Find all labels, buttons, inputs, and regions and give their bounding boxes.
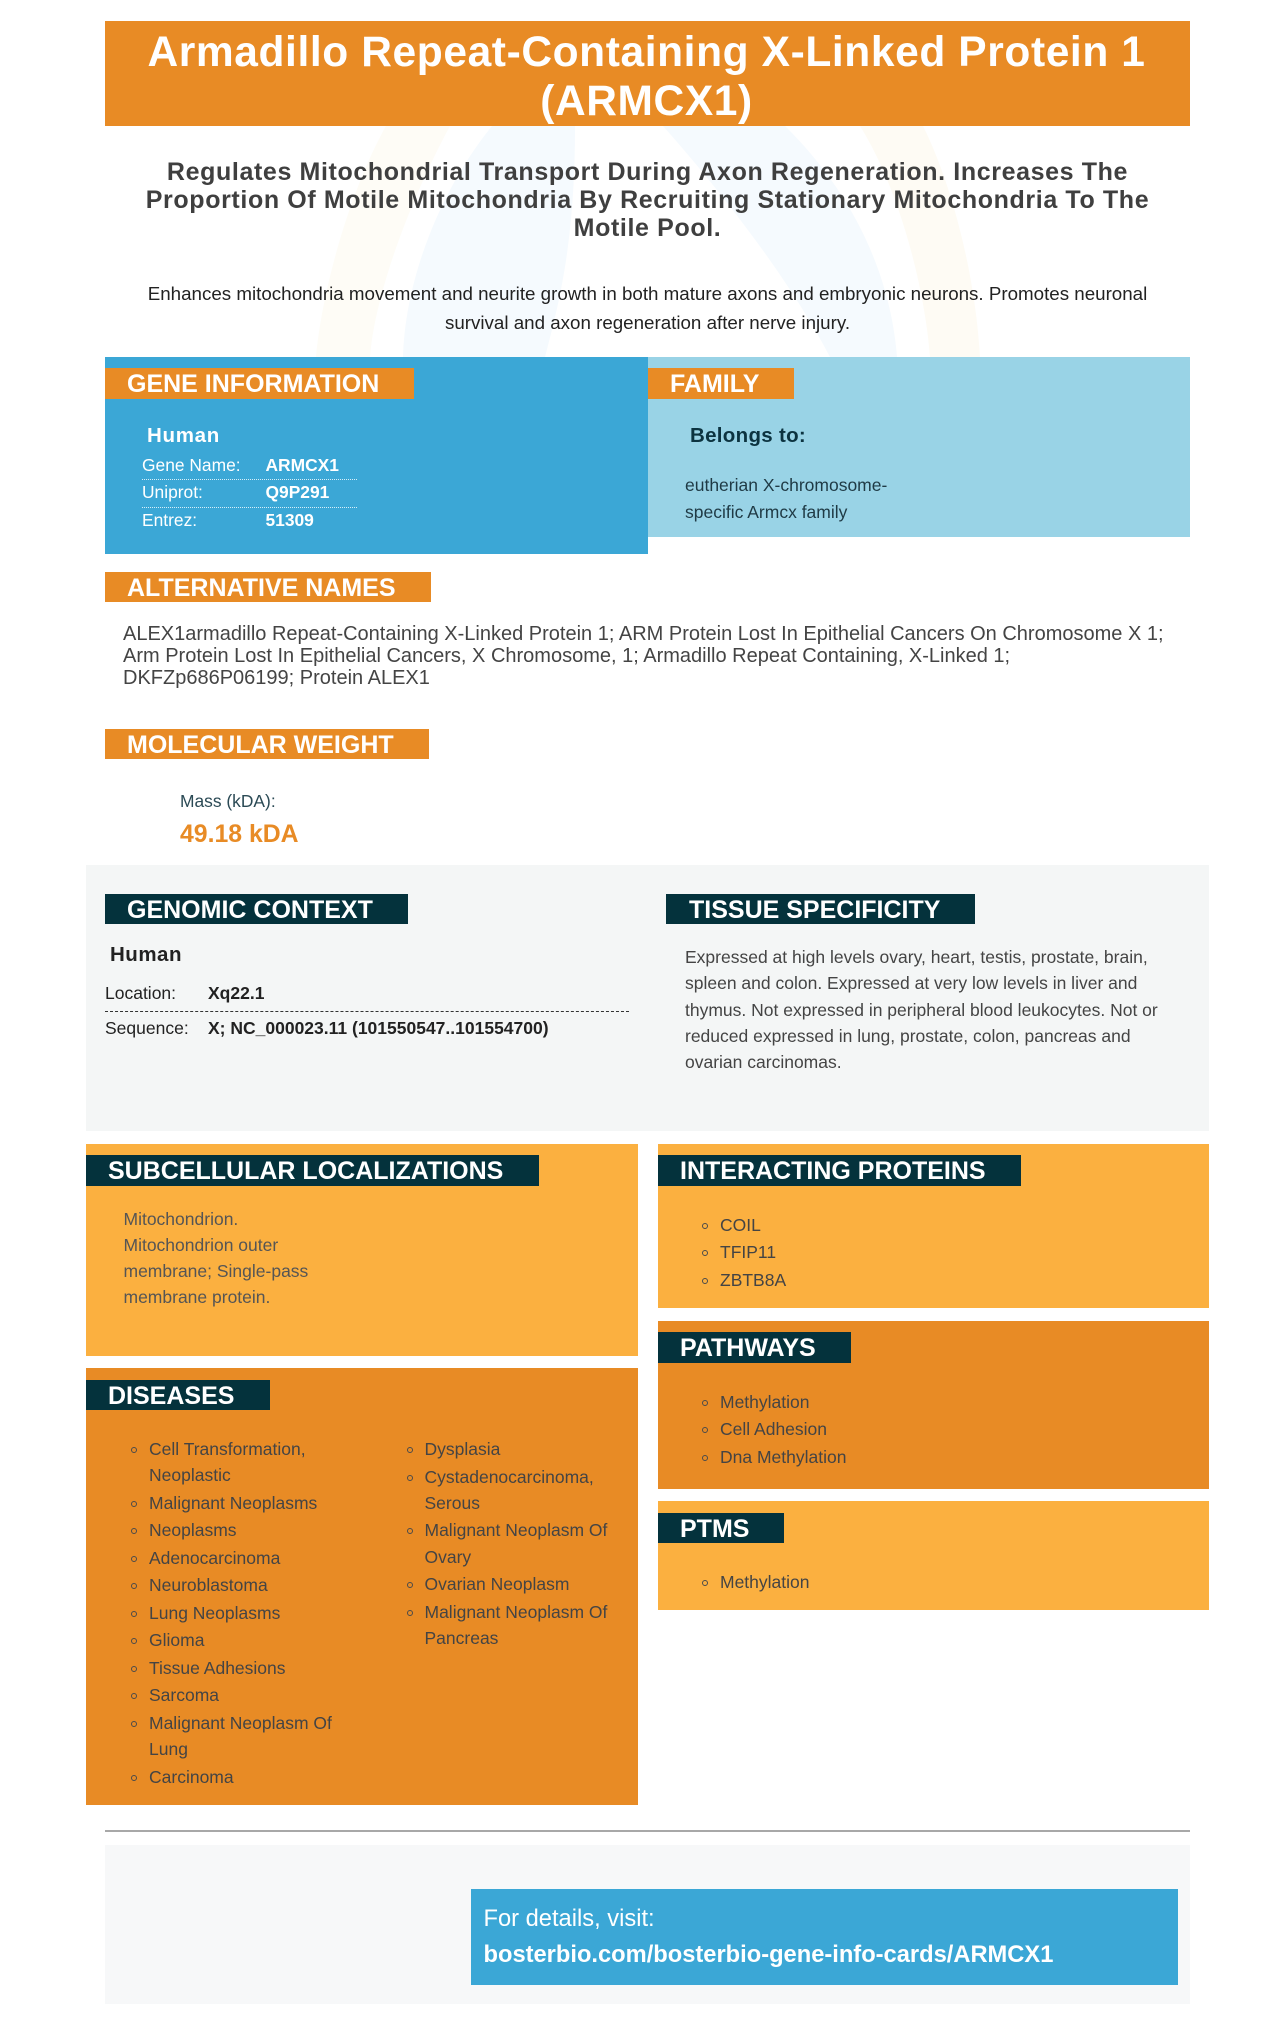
disease list column 1: Lung <box>149 1739 188 1759</box>
disease list column 2: Ovarian Neoplasm <box>424 1574 569 1594</box>
tissue specificity text <box>685 947 1158 1072</box>
localization text: Mitochondrion. <box>124 1209 238 1229</box>
subtitle <box>146 158 1149 242</box>
heading: genomic context: GENOMIC CONTEXT <box>127 896 373 924</box>
disease list column 2: Malignant Neoplasm Of <box>424 1520 607 1540</box>
disease list column 1: Carcinoma <box>149 1767 234 1787</box>
gene details table: ARMCX1 <box>266 455 339 475</box>
disease list column 1: Glioma <box>149 1630 204 1650</box>
alternative names text: DKFZp686P06199; Protein ALEX1 <box>123 667 430 689</box>
belongs to label: Belongs to: <box>690 424 806 446</box>
family text: eutherian X-chromosome- <box>685 475 887 495</box>
pathway list: Dna Methylation <box>720 1447 846 1467</box>
gene details table: 51309 <box>266 510 314 530</box>
panel: pathways <box>658 1321 1209 1489</box>
protein list: COIL <box>720 1215 761 1235</box>
disease list column 1: Neoplastic <box>149 1465 231 1485</box>
heading: interacting proteins: INTERACTING PROTEINS <box>680 1157 986 1185</box>
species label: Human <box>147 424 220 446</box>
tissue specificity text: Expressed at high levels ovary, heart, testis, prostate, brain, <box>685 947 1148 967</box>
details label: For details, visit: <box>484 1906 655 1932</box>
gene details table: Q9P291 <box>266 482 329 502</box>
localization text: membrane; Single-pass <box>124 1261 308 1281</box>
tissue specificity text: thymus. Not expressed in peripheral blood leukocytes. Not or <box>685 1000 1158 1020</box>
family text: specific Armcx family <box>685 502 847 522</box>
panel: diseases <box>86 1368 638 1805</box>
mass label: Mass (kDA): <box>180 791 276 811</box>
heading: gene information: GENE INFORMATION <box>127 370 379 398</box>
heading: subcellular localizations: SUBCELLULAR LOCALIZATIONS <box>108 1157 503 1185</box>
summary paragraph: survival and axon regeneration after nerve injury. <box>445 312 850 333</box>
localization text <box>124 1209 308 1307</box>
gene details table: Uniprot: <box>142 482 203 502</box>
disease list column 1 <box>131 1439 332 1787</box>
heading: diseases: DISEASES <box>108 1382 234 1410</box>
gene details table: Gene Name: <box>142 455 241 475</box>
callout: details link <box>471 1889 1178 1985</box>
genomic location rows: Xq22.1 <box>208 983 264 1003</box>
disease list column 1: Malignant Neoplasms <box>149 1493 317 1513</box>
heading: ptms <box>658 1513 784 1543</box>
genomic location rows: Location: <box>105 983 176 1003</box>
gene details table: Entrez: <box>142 510 197 530</box>
disease list column 2: Dysplasia <box>424 1439 500 1459</box>
protein list: TFIP11 <box>720 1242 776 1262</box>
title banner: Armadillo Repeat-Containing X-Linked Protein 1 <box>147 29 1146 76</box>
heading: ptms: PTMS <box>680 1515 749 1543</box>
heading: family <box>648 368 794 399</box>
protein list <box>702 1215 786 1290</box>
title banner: (ARMCX1) <box>540 78 753 125</box>
heading: pathways: PATHWAYS <box>680 1334 816 1362</box>
disease list column 1: Neuroblastoma <box>149 1575 268 1595</box>
pathway list <box>702 1392 846 1467</box>
heading: pathways <box>658 1332 851 1363</box>
disease list column 2: Pancreas <box>424 1628 498 1648</box>
disease list column 1: Sarcoma <box>149 1685 219 1705</box>
heading: diseases <box>86 1380 270 1410</box>
panel: ptms <box>658 1501 1209 1610</box>
species label: Human <box>110 943 182 966</box>
gene details table <box>142 455 357 530</box>
tissue specificity text: reduced expressed in lung, prostate, colon, pancreas and <box>685 1026 1131 1046</box>
disease list column 1: Cell Transformation, <box>149 1439 306 1459</box>
family text <box>685 475 887 522</box>
disease list column 2: Serous <box>424 1493 480 1513</box>
panel: family <box>648 357 1190 537</box>
panel: footer <box>105 1845 1190 2004</box>
panel: subcellular localizations <box>86 1144 638 1356</box>
genomic location rows <box>105 983 629 1038</box>
details url: bosterbio.com/bosterbio-gene-info-cards/ARMCX1 <box>484 1942 1053 1968</box>
ptm list: Methylation <box>720 1572 810 1592</box>
alternative names text: Arm Protein Lost In Epithelial Cancers, X Chromosome, 1; Armadillo Repeat Containing, X-Linked 1; <box>123 645 1010 667</box>
genomic location rows: Sequence: <box>105 1018 189 1038</box>
pathway list: Methylation <box>720 1392 810 1412</box>
heading: alternative names: ALTERNATIVE NAMES <box>127 574 396 602</box>
summary paragraph: Enhances mitochondria movement and neurite growth in both mature axons and embryonic neurons. Promotes neuronal <box>148 282 1147 304</box>
disease list column 2: Malignant Neoplasm Of <box>424 1602 607 1622</box>
panel: genomic context and tissue specificity <box>86 865 1209 1131</box>
heading: tissue specificity: TISSUE SPECIFICITY <box>689 896 940 924</box>
disease list column 1: Neoplasms <box>149 1520 237 1540</box>
heading: molecular weight: MOLECULAR WEIGHT <box>127 731 394 759</box>
localization text: membrane protein. <box>124 1287 270 1307</box>
localization text: Mitochondrion outer <box>124 1235 278 1255</box>
title banner <box>105 21 1190 126</box>
pathway list: Cell Adhesion <box>720 1419 827 1439</box>
subtitle: Motile Pool. <box>574 214 721 242</box>
mass value: 49.18 kDA <box>180 821 299 848</box>
disease list column 2: Cystadenocarcinoma, <box>424 1467 594 1487</box>
alternative names text: ALEX1armadillo Repeat-Containing X-Linked Protein 1; ARM Protein Lost In Epithelial Cancers On Chromosome X 1; <box>123 623 1164 645</box>
panel: interacting proteins <box>658 1144 1209 1308</box>
subtitle: Proportion Of Motile Mitochondria By Recruiting Stationary Mitochondria To The <box>146 186 1149 214</box>
background watermark <box>316 126 980 357</box>
protein list: ZBTB8A <box>720 1270 786 1290</box>
summary paragraph <box>148 282 1147 333</box>
panel: gene information <box>105 357 648 554</box>
tissue specificity text: ovarian carcinomas. <box>685 1052 842 1072</box>
disease list column 1: Adenocarcinoma <box>149 1548 280 1568</box>
alternative names text <box>123 623 1164 689</box>
disease list column 1: Lung Neoplasms <box>149 1603 280 1623</box>
disease list column 2 <box>407 1439 608 1648</box>
disease list column 2: Ovary <box>424 1547 471 1567</box>
genomic location rows: X; NC_000023.11 (101550547..101554700) <box>208 1018 549 1038</box>
subtitle: Regulates Mitochondrial Transport During Axon Regeneration. Increases The <box>167 158 1128 186</box>
disease list column 1: Tissue Adhesions <box>149 1658 286 1678</box>
tissue specificity text: spleen and colon. Expressed at very low levels in liver and <box>685 973 1137 993</box>
heading: family: FAMILY <box>670 370 759 398</box>
disease list column 1: Malignant Neoplasm Of <box>149 1713 332 1733</box>
